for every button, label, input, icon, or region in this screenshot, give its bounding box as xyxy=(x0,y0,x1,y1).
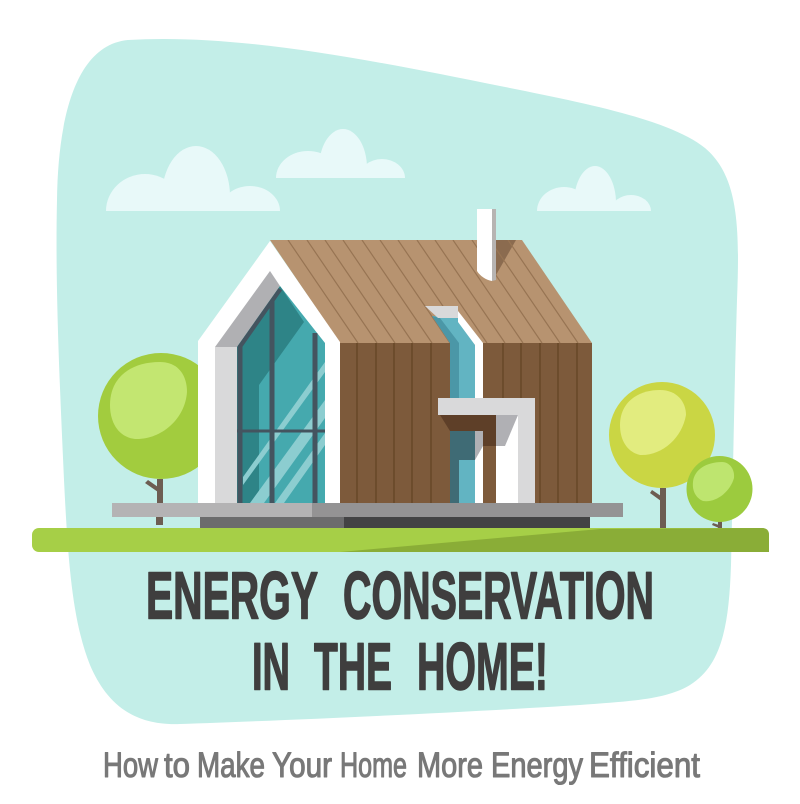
tree: left xyxy=(98,353,224,525)
cloud right xyxy=(537,166,651,211)
subtitle xyxy=(103,746,700,785)
trunk xyxy=(650,488,666,528)
tree: right large xyxy=(609,382,715,528)
ground xyxy=(32,528,769,552)
foliage xyxy=(98,353,224,479)
wall xyxy=(340,343,592,503)
platform xyxy=(112,503,623,528)
trunk xyxy=(145,479,163,525)
highlight xyxy=(620,390,686,455)
cloud left xyxy=(106,146,280,211)
title line 2 xyxy=(252,630,548,704)
cloud middle xyxy=(276,129,405,178)
subtitle: Energy xyxy=(491,746,583,785)
tree: right small xyxy=(686,456,752,528)
foliage xyxy=(686,456,752,522)
gable inner grey xyxy=(215,271,280,347)
entrance slot xyxy=(425,306,483,503)
background blob xyxy=(57,39,738,724)
roof xyxy=(270,240,592,343)
foliage xyxy=(609,382,715,488)
title line 2: IN xyxy=(252,630,290,704)
trunk xyxy=(712,520,722,528)
highlight xyxy=(693,462,734,501)
subtitle: Home xyxy=(340,746,407,785)
chimney xyxy=(477,209,496,281)
house xyxy=(198,209,592,503)
title line 2: HOME! xyxy=(417,630,548,704)
gable frame xyxy=(198,241,340,503)
title line 1: ENERGY xyxy=(146,558,318,634)
clouds xyxy=(106,129,651,211)
title line 2: THE xyxy=(314,630,392,704)
subtitle: to xyxy=(164,746,190,785)
subtitle: How xyxy=(103,746,159,785)
subtitle: Your xyxy=(272,746,332,785)
title line 1 xyxy=(146,558,654,634)
title xyxy=(146,558,654,704)
porch xyxy=(438,398,535,503)
highlight xyxy=(110,362,187,439)
subtitle: Efficient xyxy=(589,746,700,785)
subtitle: More xyxy=(417,746,483,785)
subtitle: Make xyxy=(197,746,265,785)
window xyxy=(237,286,325,503)
gable inner wall xyxy=(215,347,237,503)
